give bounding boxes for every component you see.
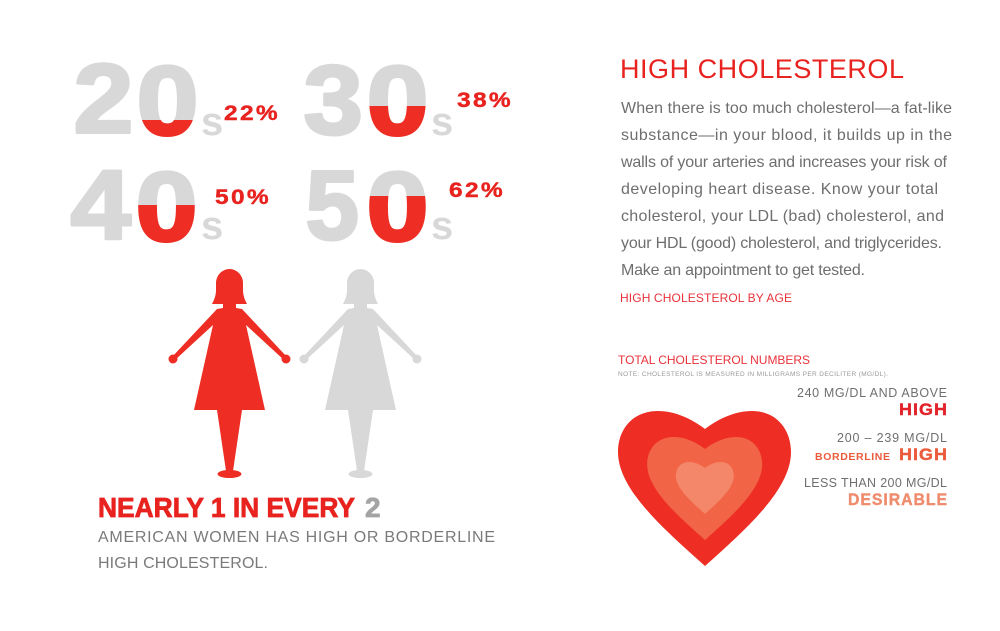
legend: high level <box>797 386 948 419</box>
text: american women statement: HIGH CHOLESTEROL. <box>98 555 268 572</box>
icon: red woman <box>168 269 290 478</box>
age group: 30s 38%: s <box>431 100 453 144</box>
age group: 50s 62%: 62% <box>449 179 505 202</box>
age group: 30s 38%: 3 <box>304 45 363 155</box>
legend: borderline high level <box>815 431 948 464</box>
text: description paragraph: substance—in your blood, it builds up in the <box>621 127 952 144</box>
age group: 40s 50%: s <box>201 204 223 248</box>
age group: 30s 38%: 0 <box>366 47 429 156</box>
text: description paragraph <box>620 100 952 279</box>
text: description paragraph: walls of your arteries and increases your risk of <box>620 154 948 171</box>
age group: 20s 22%: 22% <box>224 102 280 125</box>
legend: high level: 240 MG/DL AND ABOVE <box>797 386 947 400</box>
legend: borderline high level: BORDERLINE <box>815 451 890 463</box>
text: description paragraph: cholesterol, your LDL (bad) cholesterol, and <box>621 208 944 225</box>
age group: 30s 38% <box>304 45 513 156</box>
text: american women statement: AMERICAN WOMEN HAS HIGH OR BORDERLINE <box>98 529 495 546</box>
age group: 40s 50%: 50% <box>215 186 271 209</box>
note: measurement unit: NOTE: CHOLESTEROL IS MEASURED IN MILLIGRAMS PER DECILITER (MG/DL). <box>618 371 888 378</box>
icon: layered heart <box>618 411 791 566</box>
legend: high level: HIGH <box>899 400 948 419</box>
age group: 20s 22% <box>74 44 280 156</box>
headline: nearly 1 in every 2: NEARLY 1 IN EVERY <box>98 492 355 523</box>
age group: 30s 38%: 38% <box>457 89 513 112</box>
headline: nearly 1 in every 2: 2 <box>365 492 381 523</box>
age group: 40s 50%: 0 <box>136 153 198 262</box>
age group: 50s 62%: s <box>431 204 453 248</box>
legend: desirable level: DESIRABLE <box>848 490 948 509</box>
legend: desirable level <box>804 476 948 509</box>
text: description paragraph: your HDL (good) cholesterol, and triglycerides. <box>621 235 942 252</box>
title: high cholesterol: HIGH CHOLESTEROL <box>620 54 904 84</box>
age group: 20s 22%: s <box>201 100 223 144</box>
icon: gray woman <box>300 269 422 478</box>
caption: high cholesterol by age: HIGH CHOLESTEROL BY AGE <box>620 291 792 305</box>
legend: desirable level: LESS THAN 200 MG/DL <box>804 476 947 490</box>
text: description paragraph: Make an appointment to get tested. <box>621 262 865 279</box>
age group: 50s 62%: 5 <box>306 150 359 260</box>
age group: 40s 50%: 4 <box>70 150 131 260</box>
legend: borderline high level: 200 – 239 MG/DL <box>837 431 947 445</box>
age group: 20s 22%: 0 <box>136 47 199 156</box>
age group: 40s 50% <box>70 150 271 262</box>
age group: 50s 62% <box>306 150 505 262</box>
age group: 50s 62%: 0 <box>366 153 429 262</box>
age group: 20s 22%: 2 <box>74 44 133 153</box>
text: description paragraph: developing heart disease. Know your total <box>621 181 938 198</box>
text: description paragraph: When there is too much cholesterol—a fat-like <box>621 100 952 117</box>
heading: total cholesterol numbers: TOTAL CHOLESTEROL NUMBERS <box>618 353 810 367</box>
legend: borderline high level: HIGH <box>899 445 948 464</box>
text: american women statement <box>98 529 495 572</box>
